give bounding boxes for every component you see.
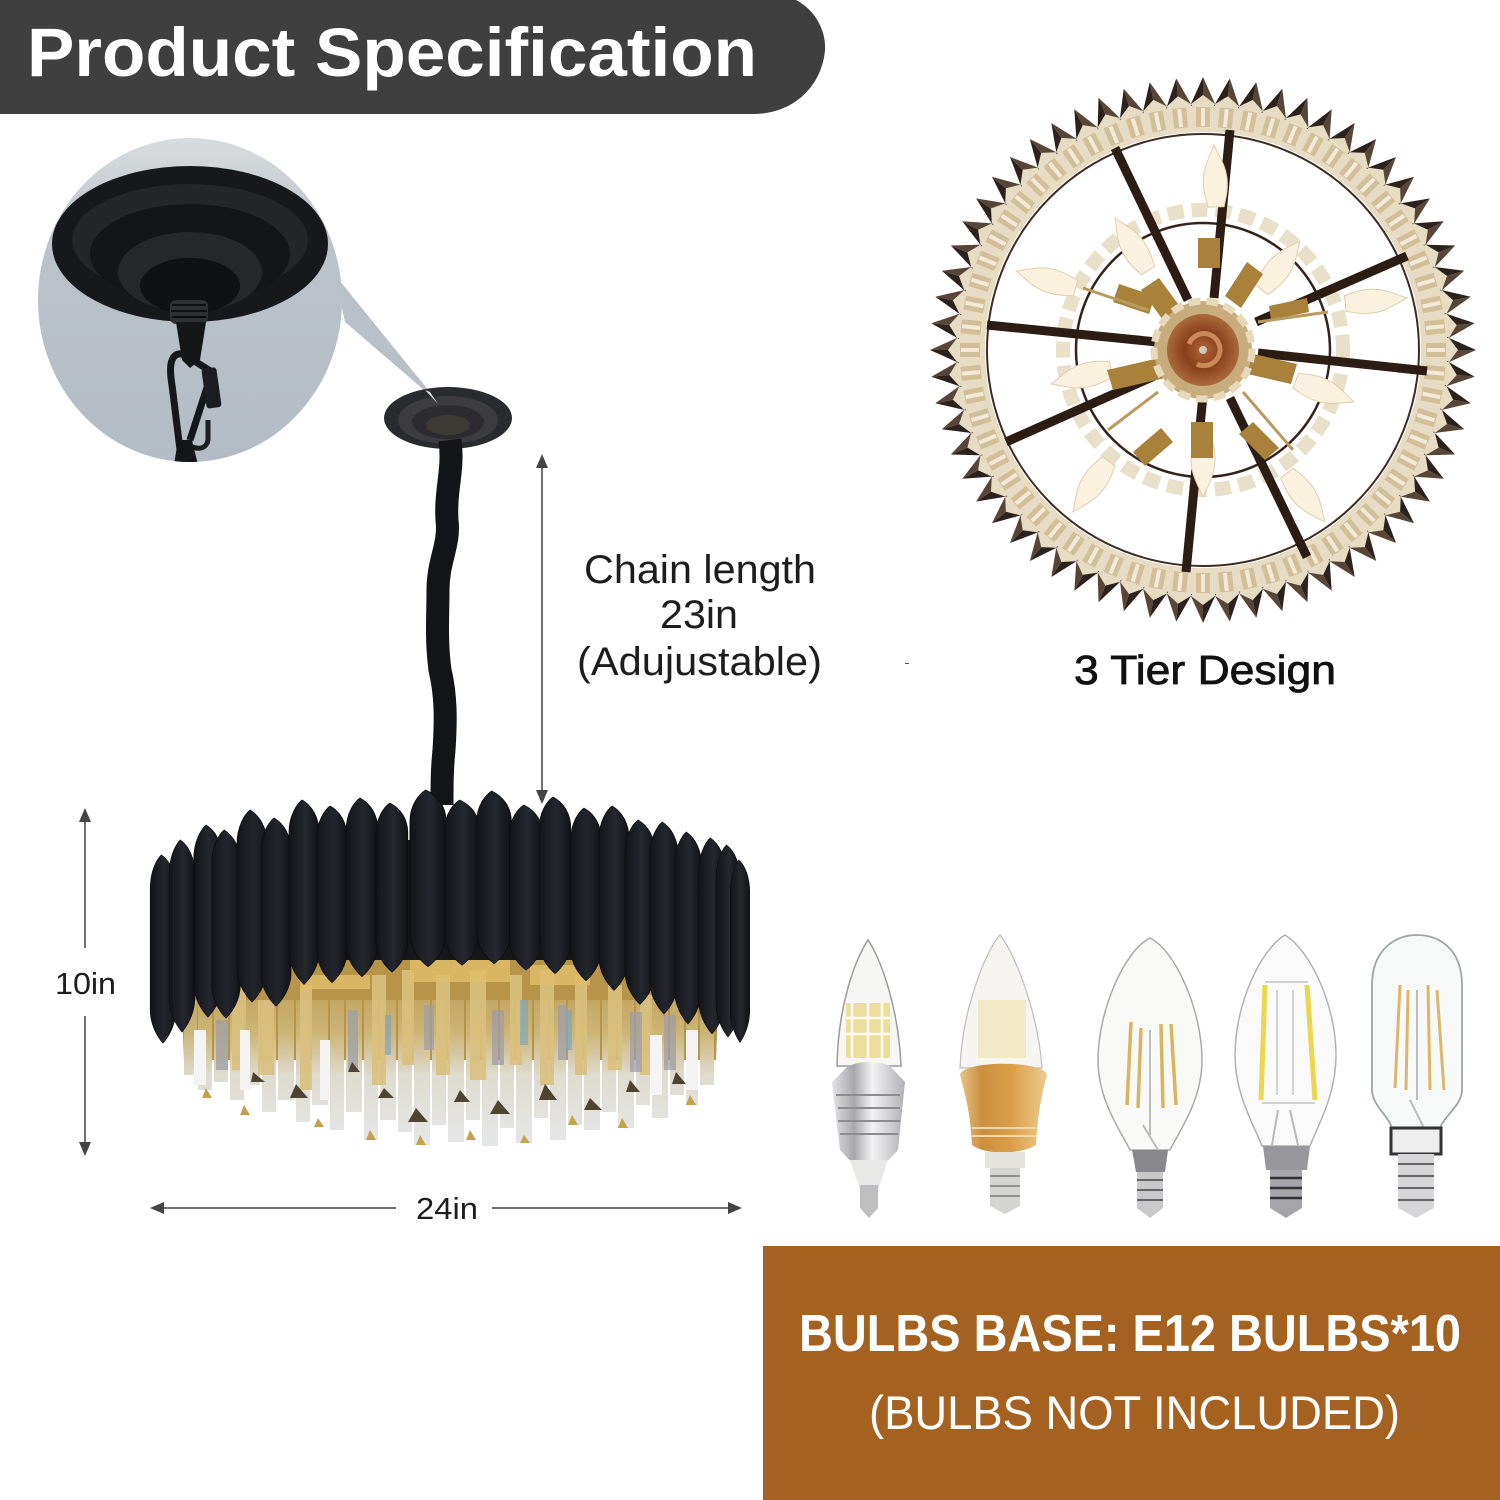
label: height: 10in <box>55 966 116 1001</box>
spokes <box>987 130 1427 572</box>
panel: bulbs base <box>763 1246 1500 1500</box>
top view of chandelier: 3 tier ring <box>916 63 1490 637</box>
label: chain length: (Adujustable) <box>577 640 822 684</box>
tiny mark <box>905 663 909 664</box>
candle sleeves <box>1107 238 1309 466</box>
arrow: width <box>150 1202 742 1214</box>
bulb 4: filament candle <box>1235 935 1336 1218</box>
second tier ring <box>1063 210 1343 490</box>
panel: bulbs base: (BULBS NOT INCLUDED) <box>869 1386 1400 1439</box>
label: chain length: Chain length <box>584 548 816 592</box>
label: chain length: 23in <box>660 593 738 637</box>
label: width: 24in <box>416 1191 478 1226</box>
central hub <box>1154 301 1252 399</box>
chain wrapped in black cord <box>438 440 451 805</box>
arrow: chain length <box>536 454 548 804</box>
outer crystal and black teeth ring <box>916 63 1490 637</box>
bulb 2: gold LED candle <box>960 935 1047 1214</box>
label: 3 tier design: 3 Tier Design <box>1074 647 1336 693</box>
ceiling canopy <box>384 387 512 449</box>
inset: ceiling canopy close-up <box>38 138 438 465</box>
black blades <box>150 855 176 1043</box>
upper crystals <box>232 970 652 1090</box>
candle bulbs <box>1013 145 1408 529</box>
chandelier <box>150 790 750 1146</box>
bulb 5: tubular filament <box>1372 935 1462 1218</box>
shade backing <box>153 840 749 1010</box>
title banner: Product Specification <box>27 14 757 91</box>
label: chain length <box>577 548 822 684</box>
gold interior <box>180 960 720 1060</box>
crystal tip triangles <box>251 1062 686 1122</box>
title banner <box>0 0 825 114</box>
bulb 1: silver LED candle <box>832 940 905 1218</box>
bulb 3: filament candle <box>1098 938 1202 1218</box>
arrow: height <box>79 808 91 1156</box>
